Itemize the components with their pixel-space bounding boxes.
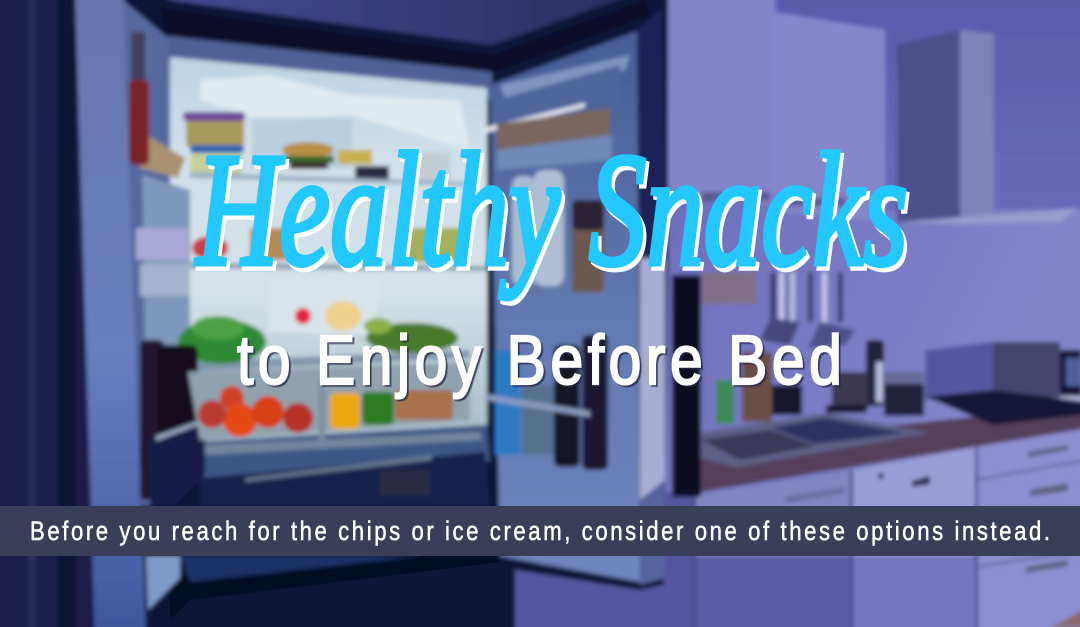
ceiling of fridge [160, 0, 645, 45]
left fridge door [75, 0, 148, 627]
door inner side panel [123, 0, 175, 505]
plate with egg on lower shelf [268, 276, 382, 335]
fridge side wall lower [142, 175, 190, 345]
upper wall shade [776, 0, 1080, 210]
subtitle: to Enjoy Before Bed [237, 320, 844, 401]
countertop and cooktop [700, 390, 1080, 492]
title: Healthy Snacks [195, 121, 911, 304]
lower dark interior below band [146, 556, 500, 620]
tagline band [0, 506, 1080, 556]
range hood [897, 30, 1078, 224]
band background [0, 506, 1080, 556]
lower cabinets [515, 428, 1080, 627]
tagline text: Before you reach for the chips or ice cream, consider one of these options instead. [30, 517, 1050, 547]
dark left edge of room [0, 0, 102, 627]
lower freezer drawer [196, 425, 490, 505]
right fridge door [484, 8, 666, 585]
interior back panel [252, 118, 352, 168]
microwave [925, 342, 1080, 404]
upper shelf contents [129, 32, 450, 182]
subtitle text: to Enjoy Before Bed [237, 320, 842, 399]
dark bottles left side [140, 340, 209, 505]
middle shelf food [136, 228, 462, 296]
sink [698, 413, 930, 467]
door bottles [495, 170, 608, 470]
fridge interior [170, 57, 487, 450]
upper cabinets [660, 0, 885, 222]
upper interior cloud detail [200, 75, 470, 150]
black top bar [160, 0, 650, 73]
kitchen tools and bottles on wall [702, 272, 924, 424]
shelf lines [145, 172, 487, 372]
salad and vegetables [178, 316, 458, 364]
crisper drawer with tomatoes and peppers [188, 362, 470, 440]
subtitle shadow: to Enjoy Before Bed [239, 322, 844, 401]
black fridge side panel [672, 275, 701, 497]
door shelf rail [485, 394, 590, 417]
fridge dark frame [123, 0, 668, 627]
interior frame band [168, 36, 492, 100]
